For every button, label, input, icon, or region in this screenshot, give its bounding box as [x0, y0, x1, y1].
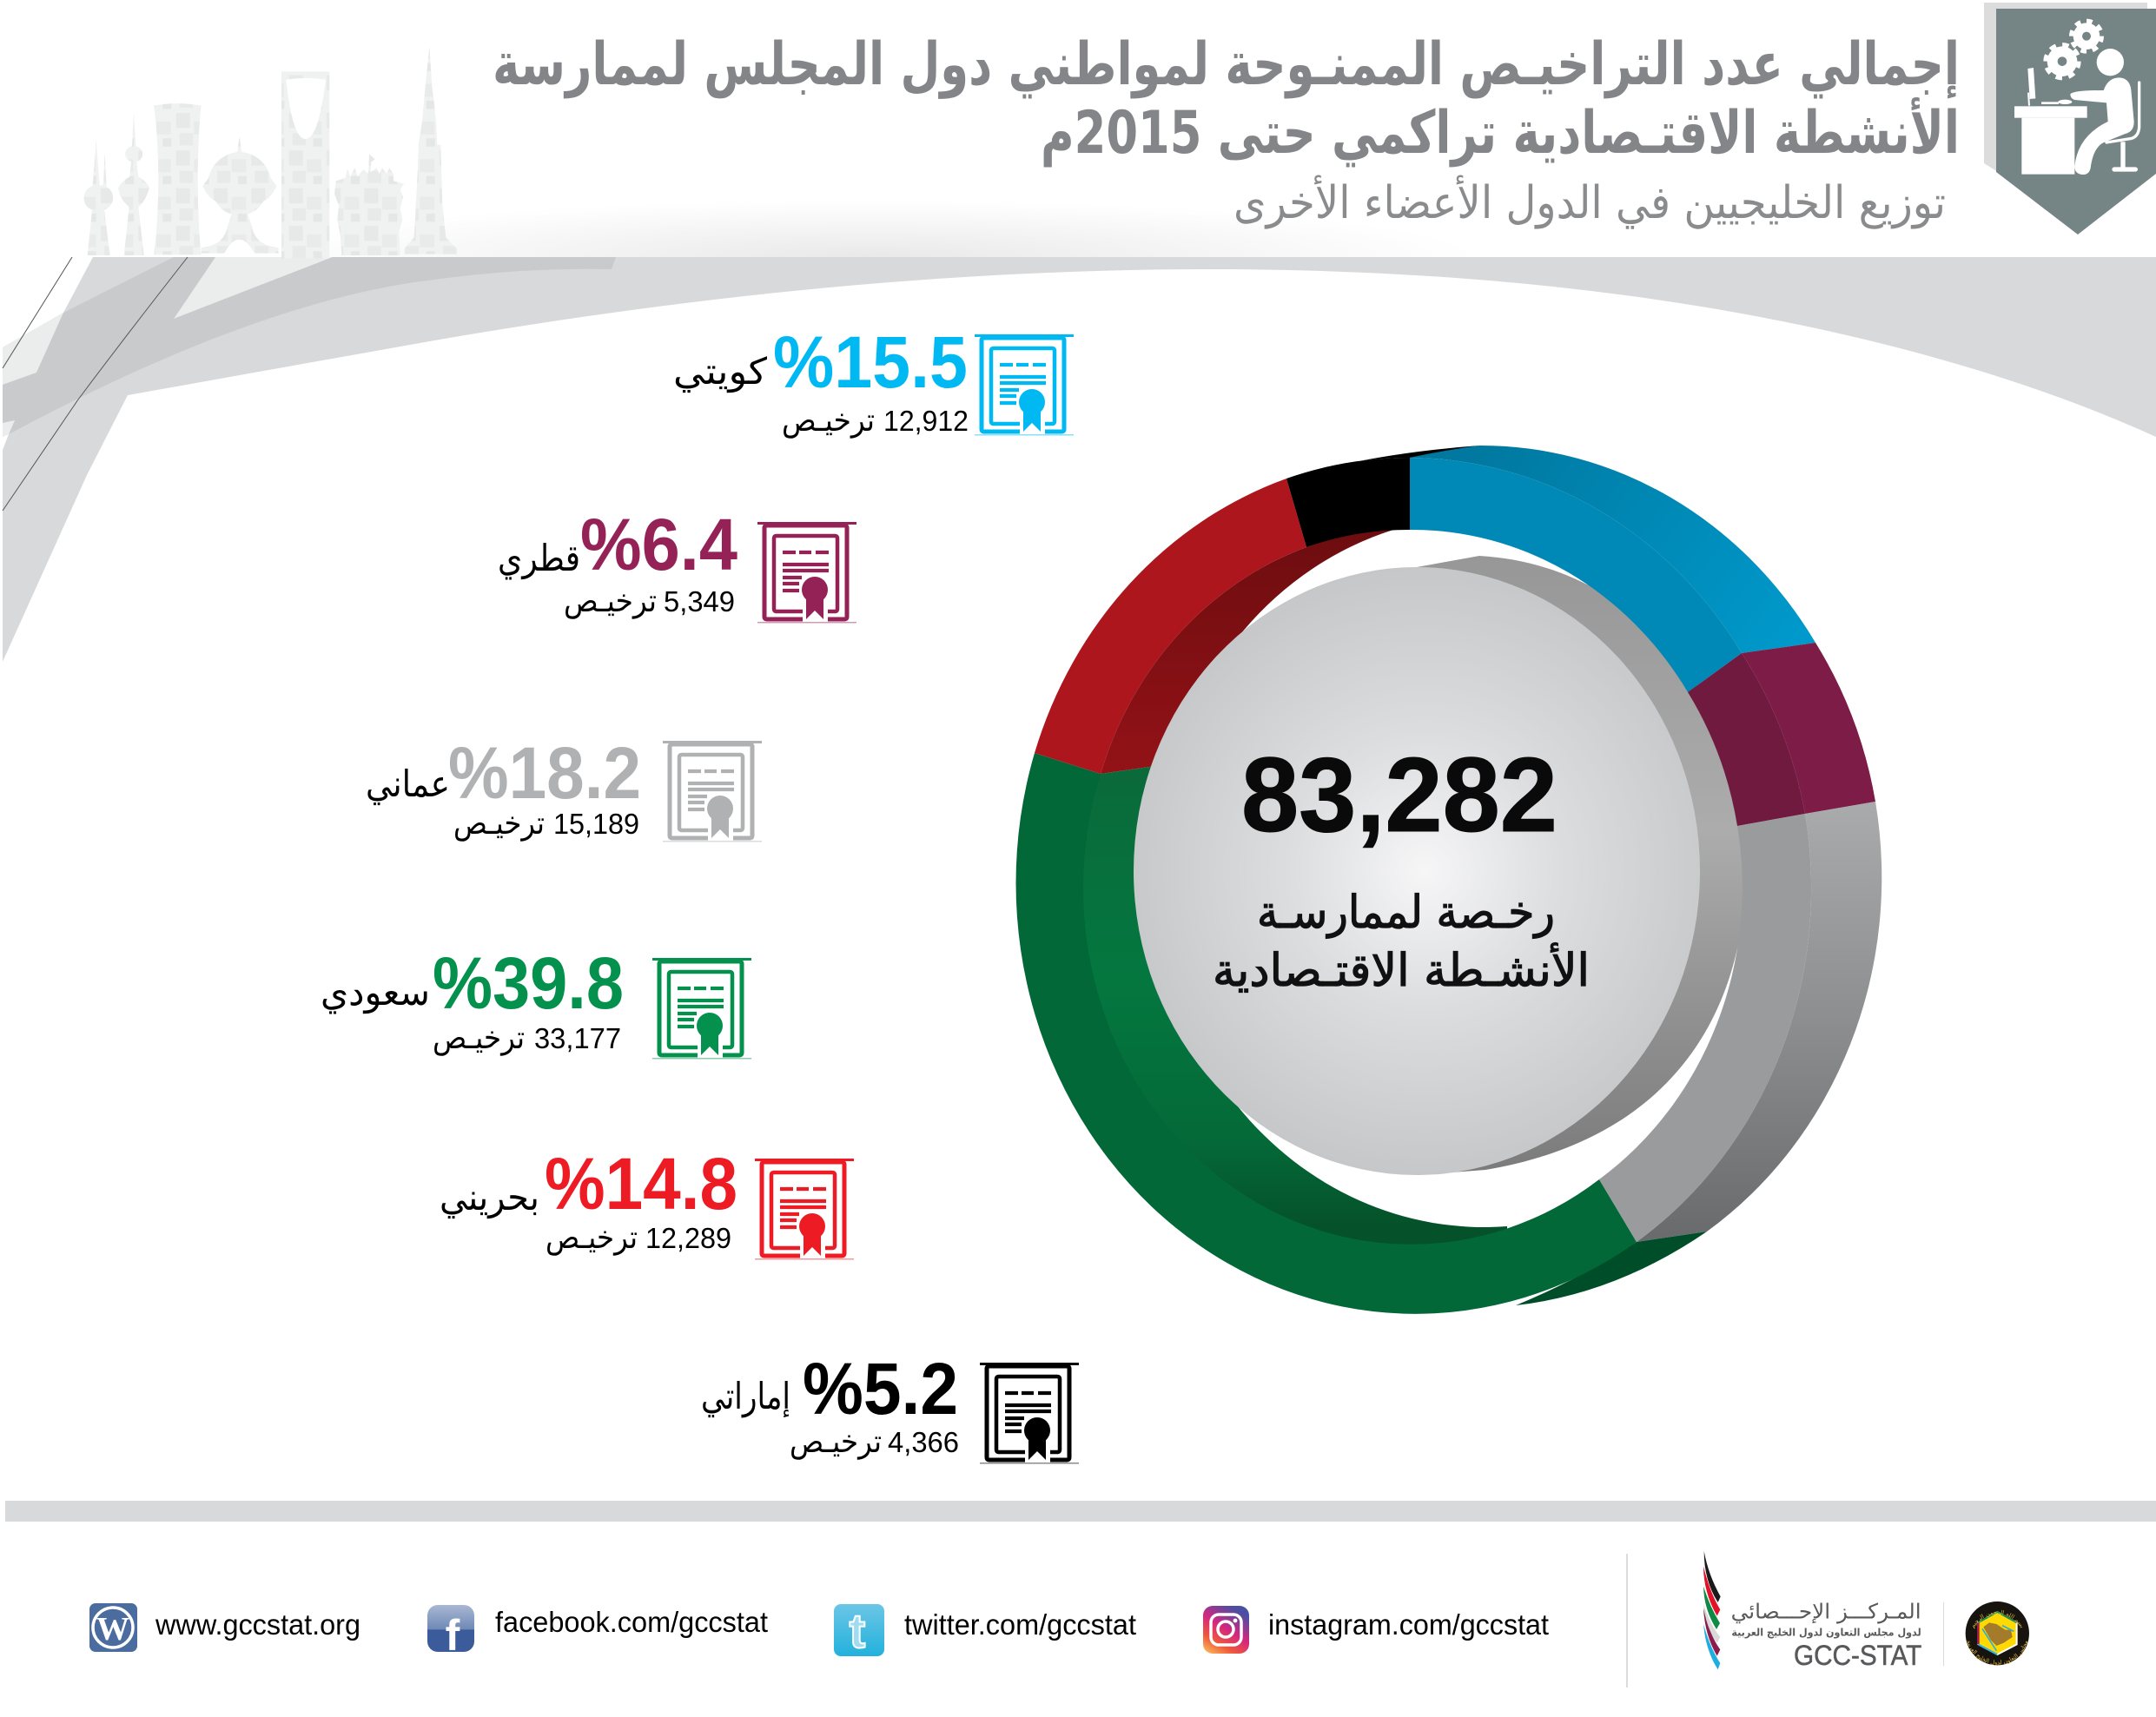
saudi label: سعودي [321, 971, 430, 1014]
omani label: عماني [366, 763, 450, 806]
header shade [261, 195, 1650, 257]
saudi count [433, 1020, 621, 1056]
icon: facebook: f [446, 1611, 460, 1660]
footer bar [5, 1501, 2156, 1522]
item: Qatari share [498, 504, 856, 624]
donut chart [1016, 446, 1882, 1314]
omani percentage: %18.2 [448, 732, 641, 814]
center caption [1213, 887, 1590, 997]
logo swoosh [1703, 1551, 1721, 1669]
ring segment: bahraini red [1035, 479, 1306, 774]
total licences number: 83,282 [1241, 736, 1557, 854]
icon: twitter: t [850, 1603, 865, 1658]
icon: wordpress [89, 1603, 137, 1652]
caption line 2: الأنشـطة الاقتـصادية [1213, 942, 1590, 997]
social: website [89, 1603, 360, 1652]
emirati label: إماراتي [701, 1375, 790, 1418]
qatari count: 5,349 [664, 585, 735, 617]
center disc side wall [1417, 556, 1746, 1175]
emirati count [790, 1424, 959, 1460]
social: facebook [427, 1605, 768, 1660]
skyline of gulf landmarks [84, 46, 457, 258]
emblem: بسم الله الرحمن الرحيم [1973, 1610, 2022, 1629]
item: Omani share [366, 732, 762, 842]
bahraini count: ترخيـص [546, 1220, 638, 1256]
saudi count: 33,177 [534, 1022, 621, 1054]
saudi count: ترخيـص [433, 1020, 525, 1056]
icon: emirati certificate [980, 1363, 1079, 1464]
social: instagram [1203, 1606, 1549, 1654]
ring segment: kuwaiti blue [1410, 458, 1742, 692]
icon: twitter [834, 1603, 884, 1658]
subtitle: توزيع الخليجيين في الدول الأعضاء الأخرى [1233, 175, 1946, 229]
emirati percentage: %5.2 [803, 1348, 958, 1430]
emirati count: 4,366 [888, 1426, 959, 1458]
omani count [453, 806, 639, 842]
kuwaiti count: 12,912 [883, 405, 969, 437]
kuwaiti count [782, 403, 969, 439]
icon: facebook [427, 1605, 474, 1660]
footer separator [1626, 1554, 1628, 1687]
emblem: مجلس التعاون لدول الخليج العربية [1967, 1641, 2027, 1666]
bahraini label: بحريني [440, 1176, 539, 1219]
kuwaiti label: كويتي [673, 350, 767, 393]
kuwaiti count: ترخيـص [782, 403, 875, 439]
item: Saudi share [321, 942, 751, 1060]
ring inner walls [1056, 530, 1507, 1270]
icon: badge with person at desk [1984, 3, 2156, 234]
title [493, 30, 1960, 168]
emirati count: ترخيـص [790, 1424, 882, 1460]
center disc face [1134, 567, 1700, 1175]
ring segment: emirati black [1286, 458, 1410, 547]
ring outer walls [1286, 446, 1882, 1305]
icon: qatari certificate [757, 522, 856, 624]
qatari count: ترخيـص [564, 584, 657, 619]
omani count: ترخيـص [453, 806, 545, 842]
icon: saudi certificate [652, 958, 751, 1060]
twitter text: twitter.com/gccstat [904, 1608, 1136, 1641]
item: Bahraini share [440, 1143, 854, 1259]
caption line 1: رخـصة لممارسـة [1257, 887, 1555, 939]
icon: bahraini certificate [755, 1159, 854, 1259]
icon: omani certificate [663, 741, 762, 842]
qatari count [564, 584, 735, 619]
qatari percentage: %6.4 [580, 504, 737, 585]
ring segment: omani gray [1599, 814, 1811, 1242]
logo latin name: GCC-STAT [1794, 1640, 1921, 1671]
item: Kuwaiti share [673, 321, 1074, 439]
omani count: 15,189 [553, 808, 639, 840]
title line 2: الأنشطة الاقتـصادية تراكمي حتى 2015م [1041, 96, 1960, 168]
kuwaiti percentage: %15.5 [773, 321, 968, 403]
ring segment: qatari purple [1688, 653, 1805, 826]
emblem [1965, 1601, 2029, 1666]
logo arabic name: المـركـــز الإحـــصائي [1731, 1599, 1921, 1623]
background swoosh band [3, 257, 2156, 662]
icon: instagram [1203, 1606, 1249, 1654]
saudi percentage: %39.8 [433, 942, 624, 1024]
facebook text: facebook.com/gccstat [495, 1606, 768, 1638]
logo: GCC-STAT [1703, 1551, 2029, 1671]
icon: kuwaiti certificate [975, 334, 1074, 436]
bahraini count [546, 1220, 731, 1256]
qatari label: قطري [498, 537, 580, 579]
website text: www.gccstat.org [155, 1608, 360, 1641]
ring segment: saudi green [1016, 753, 1637, 1314]
item: Emirati share [701, 1348, 1079, 1464]
bahraini percentage: %14.8 [545, 1143, 737, 1225]
instagram text: instagram.com/gccstat [1268, 1608, 1549, 1641]
social: twitter [834, 1603, 1136, 1658]
bahraini count: 12,289 [645, 1222, 731, 1254]
logo arabic subtitle: لدول مجلس التعاون لدول الخليج العربية [1731, 1626, 1921, 1639]
icon: wordpress: W [96, 1611, 129, 1648]
